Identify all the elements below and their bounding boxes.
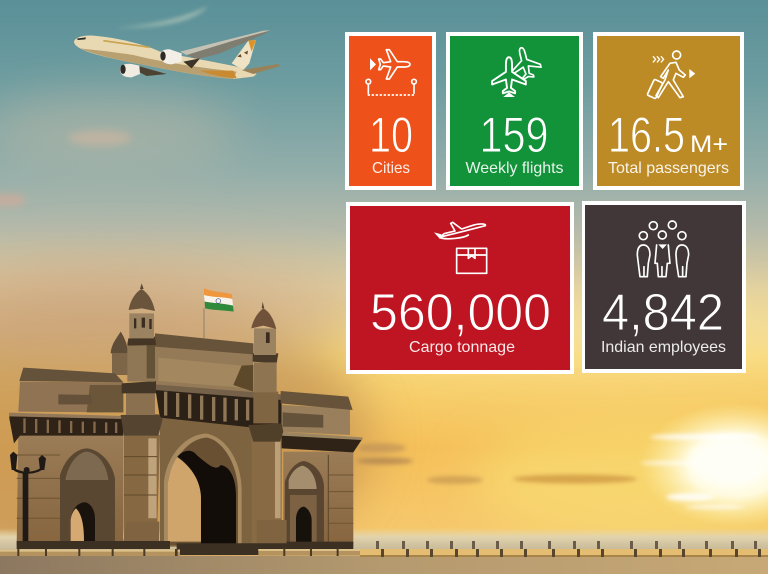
stat: 10: 10 [369, 107, 413, 163]
engines [120, 64, 140, 77]
panel: total passengers [593, 32, 744, 190]
label: Weekly flights: Weekly flights [466, 160, 564, 177]
icon: plane above cargo box [434, 222, 487, 273]
near wing [138, 66, 167, 76]
flag of India on pole [204, 288, 234, 338]
central upper block [155, 334, 253, 392]
icon: walking passenger with suitcase [647, 51, 695, 99]
label: Indian employees: Indian employees [601, 339, 726, 356]
label: Cargo tonnage: Cargo tonnage [409, 339, 515, 356]
central frieze [155, 387, 282, 432]
right arch [285, 461, 324, 546]
stat: 16.5M+: 16.5 [608, 107, 685, 163]
label: Total passengers: Total passengers [608, 160, 729, 177]
panel: cargo tonnage [346, 202, 574, 374]
panel: weekly flights [446, 32, 583, 190]
right wing [283, 452, 353, 546]
stat: 4,842: 4,842 [602, 284, 724, 342]
icon: plane between two pins [366, 50, 416, 95]
central body [160, 418, 253, 547]
steps [17, 541, 353, 555]
horizontal tail [242, 64, 280, 74]
left frieze [9, 413, 123, 443]
left lines [17, 455, 60, 518]
panel: total passengers: M+ [690, 131, 728, 158]
icon: two planes [492, 44, 543, 97]
left small turret [111, 332, 128, 353]
balustrade left [0, 549, 768, 557]
airplane [74, 30, 280, 79]
label: Cities: Cities [372, 160, 410, 177]
icon: group of people [637, 221, 689, 277]
stat: 159: 159 [480, 107, 548, 163]
seafront balustrade [0, 541, 768, 574]
fuselage [74, 36, 257, 79]
left arch [60, 448, 115, 546]
main arch opening [168, 438, 238, 545]
stat: 560,000: 560,000 [370, 284, 551, 342]
far wing [180, 30, 271, 59]
panel: cities [345, 32, 436, 190]
Gateway of India monument [0, 283, 768, 557]
tail fin [232, 40, 256, 70]
panel: Indian employees [582, 201, 746, 373]
left pier [124, 435, 160, 547]
street lamp [10, 452, 46, 542]
left wing [17, 435, 123, 546]
right pier [252, 432, 282, 547]
